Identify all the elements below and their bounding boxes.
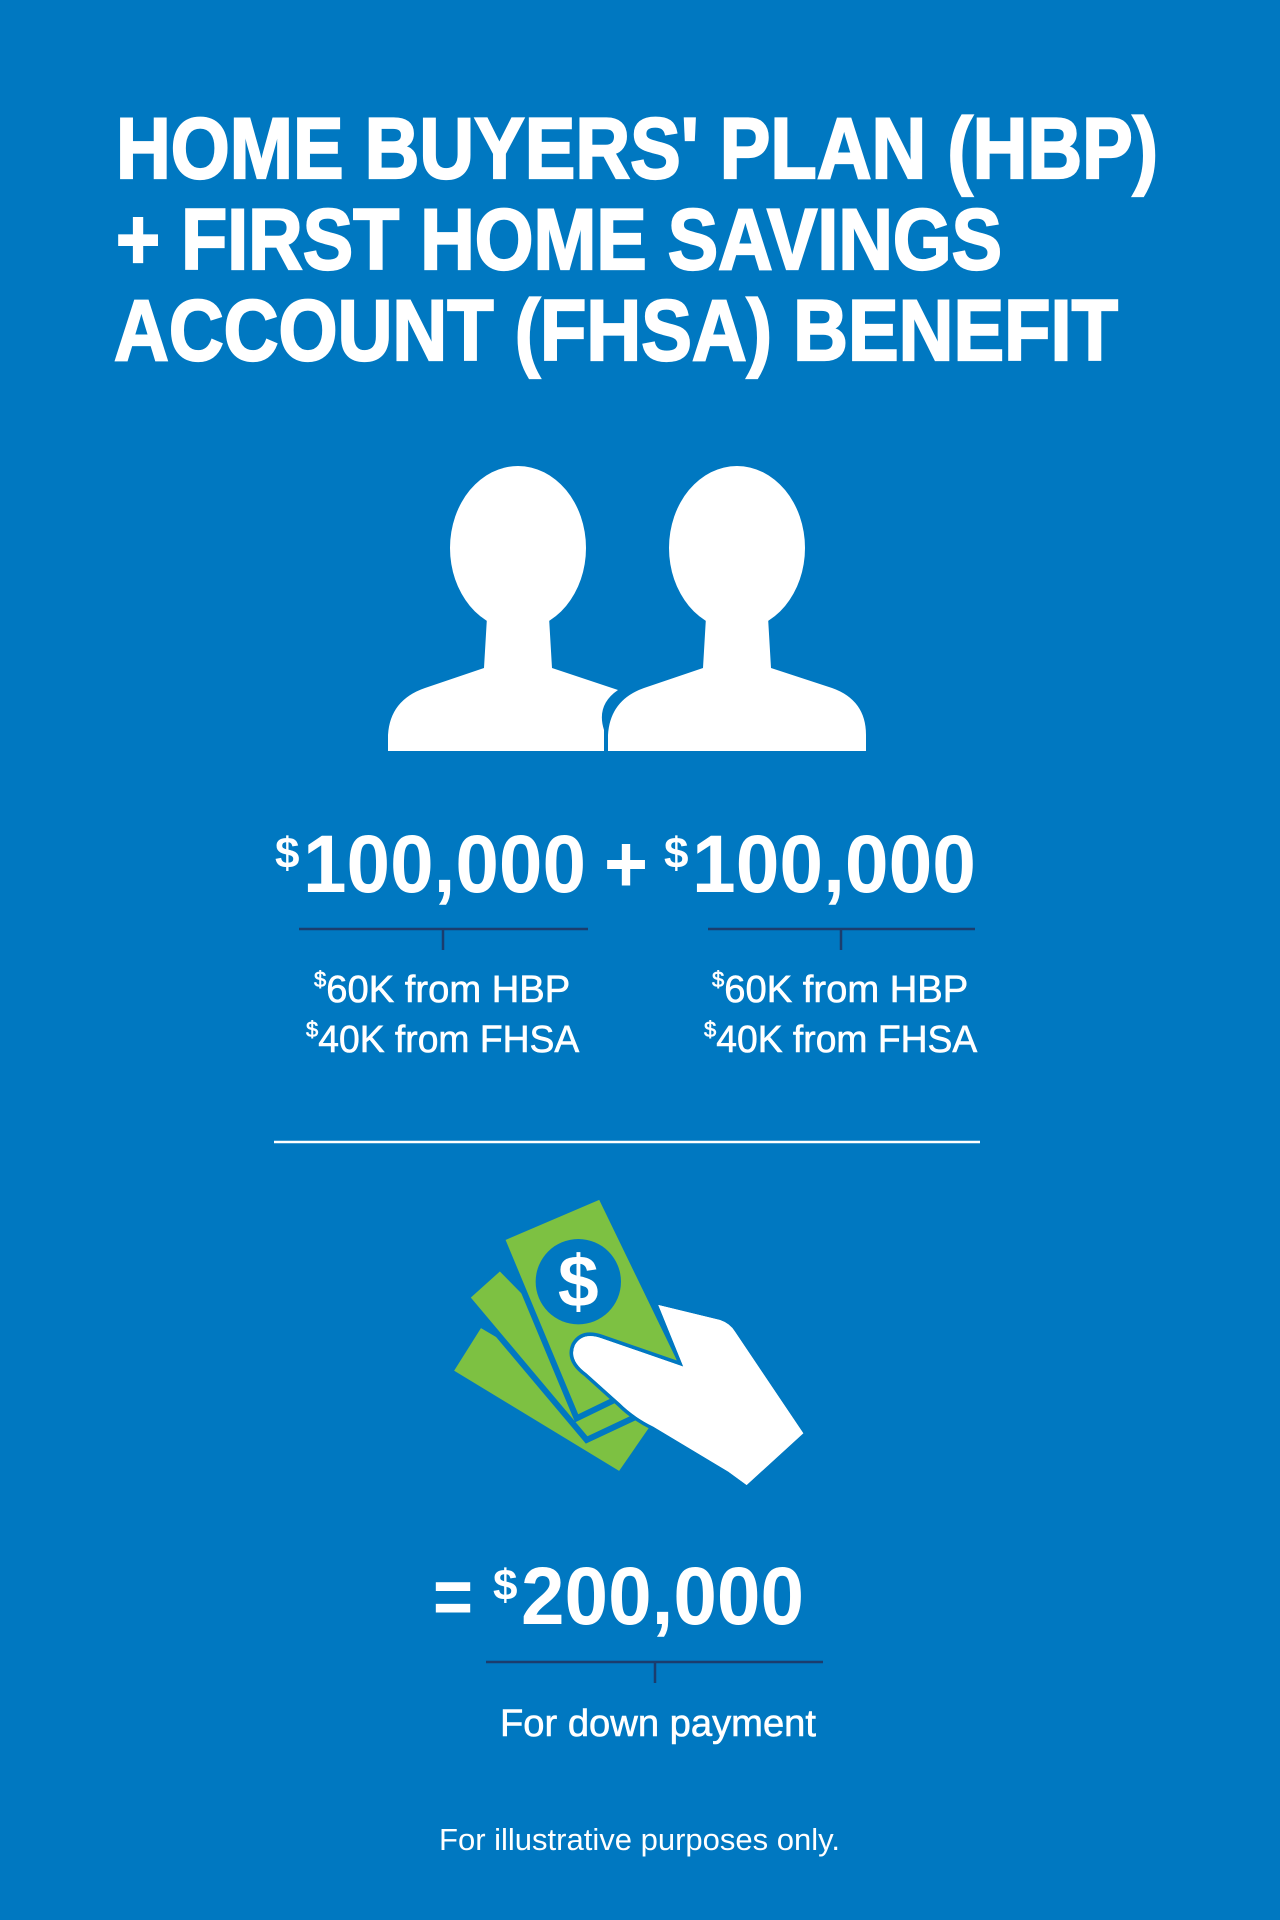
amount left: 100,000: [303, 819, 586, 910]
total amount: 200,000: [521, 1551, 804, 1642]
amount right: $: [664, 829, 688, 878]
bracket left: [299, 929, 588, 950]
title: ACCOUNT (FHSA) BENEFIT: [114, 283, 1118, 379]
breakdown right: [704, 967, 978, 1061]
icon: hand holding money: [450, 1196, 803, 1485]
icon: two people: [388, 466, 866, 751]
bracket right: [708, 929, 975, 950]
breakdown left: $: [306, 1017, 318, 1042]
breakdown right: 60K from HBP: [724, 969, 968, 1011]
breakdown right: $: [712, 967, 724, 992]
breakdown left: 60K from HBP: [326, 969, 570, 1011]
breakdown left: $: [314, 967, 326, 992]
caption: down payment: For down payment: [500, 1703, 816, 1745]
breakdown right: 40K from FHSA: [716, 1019, 978, 1061]
amount left: $: [275, 829, 299, 878]
breakdown right: $: [704, 1017, 716, 1042]
amount right: 100,000: [692, 819, 976, 910]
bracket total: [486, 1662, 823, 1683]
footnote: For illustrative purposes only.: [439, 1822, 840, 1857]
plus sign: +: [604, 819, 648, 910]
title: + FIRST HOME SAVINGS: [116, 192, 1002, 288]
title: HOME BUYERS' PLAN (HBP): [116, 101, 1158, 197]
total amount: =: [433, 1552, 473, 1641]
breakdown left: [306, 967, 580, 1061]
breakdown left: 40K from FHSA: [318, 1019, 580, 1061]
total amount: $: [493, 1561, 517, 1610]
icon: hand holding money: $: [558, 1241, 599, 1323]
title: [114, 101, 1158, 379]
